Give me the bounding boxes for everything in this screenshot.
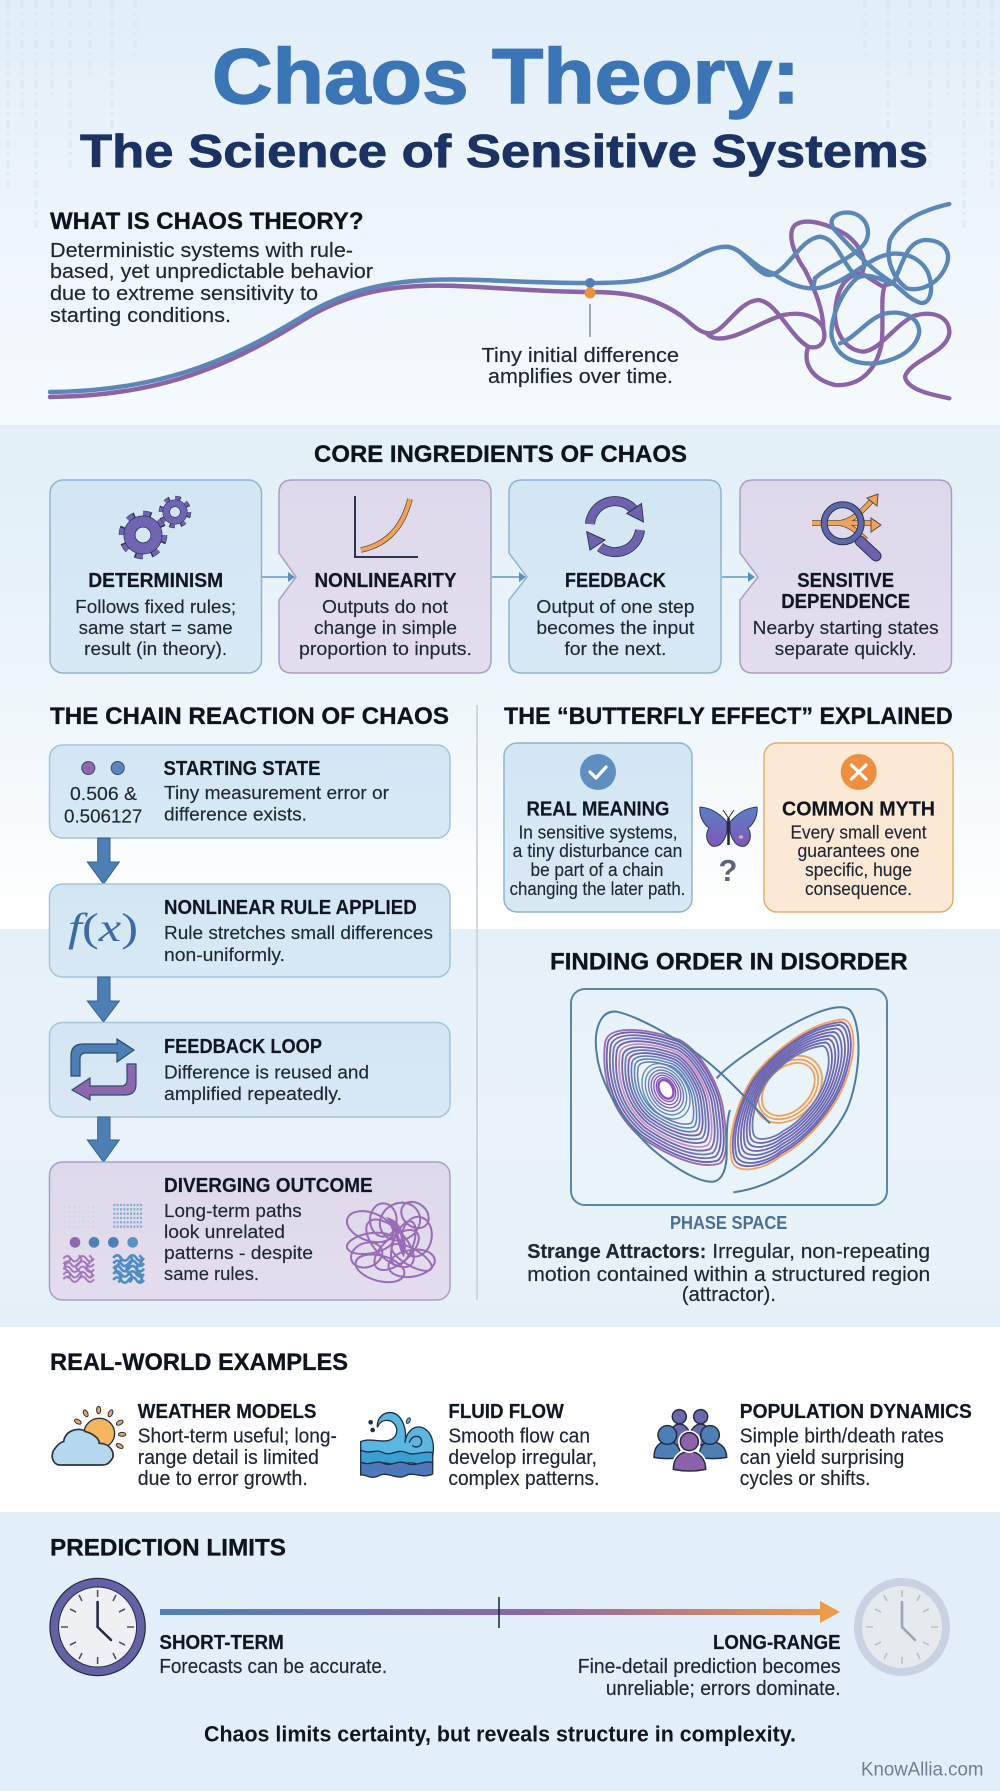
label: common myth: COMMON MYTH	[782, 798, 935, 820]
text: weather models	[138, 1401, 337, 1490]
text: diverging outcome: look unrelated	[164, 1221, 285, 1242]
arrow: feedback to sensitive dependence	[722, 572, 755, 582]
text: short-term	[159, 1632, 387, 1678]
text: real meaning	[510, 821, 685, 899]
text: feedback loop: FEEDBACK LOOP	[164, 1036, 322, 1058]
text: feedback loop	[164, 1036, 369, 1104]
label: feedback: FEEDBACK	[565, 570, 666, 592]
heading: prediction limits: PREDICTION LIMITS	[50, 1535, 286, 1562]
text: real meaning: changing the later path.	[510, 878, 685, 899]
text: common myth: consequence.	[805, 878, 912, 899]
text: closing statement: Chaos limits certainty, but reveals structure in complexity.	[204, 1722, 796, 1747]
arrow: step 1 to 2	[87, 838, 119, 884]
text: common myth: guarantees one	[798, 840, 920, 861]
text: fluid flow: complex patterns.	[448, 1467, 599, 1490]
icon: nonlinear curve	[355, 496, 418, 557]
text: nonlinearity description	[299, 596, 472, 659]
arrow: nonlinearity to feedback	[492, 572, 526, 582]
label: sensitive dependence: SENSITIVE	[797, 570, 894, 592]
text: sensitive dependence description	[753, 617, 939, 659]
card: real meaning	[504, 743, 692, 912]
step: feedback loop	[50, 1022, 450, 1117]
text: feedback description: Output of one step	[536, 596, 694, 617]
caption: tiny initial difference	[482, 344, 679, 388]
chart: speckle pattern grid	[63, 1205, 144, 1283]
icon: loop arrows	[71, 1039, 136, 1100]
text: long-range: unreliable; errors dominate.	[606, 1677, 841, 1700]
text: weather models: Short-term useful; long-	[138, 1425, 337, 1448]
text: long-range	[578, 1632, 841, 1700]
icon: check mark	[580, 754, 616, 790]
icon: f(x): f(x)	[68, 905, 138, 950]
text: weather models: WEATHER MODELS	[138, 1401, 316, 1423]
text: nonlinearity description: proportion to inputs.	[299, 638, 472, 659]
values: starting numbers: 0.506127	[64, 806, 142, 826]
text: fluid flow	[448, 1401, 599, 1490]
heading: core ingredients: CORE INGREDIENTS OF CHAOS	[314, 441, 687, 468]
text: starting state: difference exists.	[164, 804, 307, 824]
text: population dynamics: cycles or shifts.	[740, 1467, 870, 1490]
chart: lorenz attractor	[596, 1007, 858, 1192]
text: population dynamics: Simple birth/death rates	[740, 1425, 944, 1448]
heading: what is chaos theory: WHAT IS CHAOS THEORY?	[50, 208, 364, 235]
panel: real-world examples	[50, 1349, 972, 1490]
label: nonlinearity: NONLINEARITY	[314, 570, 457, 592]
panel: chain reaction	[50, 703, 450, 1300]
label: sensitive dependence: DEPENDENCE	[781, 591, 910, 613]
text: short-term: Forecasts can be accurate.	[159, 1655, 387, 1678]
heading: finding order: FINDING ORDER IN DISORDER	[550, 949, 908, 976]
text: population dynamics	[740, 1401, 972, 1490]
heading: butterfly effect: THE “BUTTERFLY EFFECT” EXPLAINED	[504, 703, 953, 730]
text: nonlinear rule: NONLINEAR RULE APPLIED	[164, 897, 417, 919]
marker: tiny difference	[584, 278, 596, 337]
step: nonlinear rule applied	[50, 884, 450, 977]
text: nonlinearity description: Outputs do not	[322, 596, 448, 617]
icon: faded clock	[854, 1578, 950, 1676]
text: feedback description: becomes the input	[536, 617, 694, 638]
text: determinism description: Follows fixed rules;	[75, 596, 236, 617]
text: strange attractors	[527, 1240, 930, 1306]
text: feedback loop: Difference is reused and	[164, 1062, 369, 1083]
text: sensitive dependence description: separate quickly.	[775, 638, 917, 659]
panel: what is chaos theory	[50, 204, 949, 398]
text: fluid flow: Smooth flow can	[448, 1425, 590, 1448]
card: feedback	[509, 480, 721, 673]
text: nonlinear rule	[164, 897, 433, 965]
text: real meaning: be part of a chain	[530, 859, 664, 880]
text: nonlinearity description: change in simple	[314, 617, 457, 638]
text: common myth	[790, 821, 926, 899]
panel: prediction limits	[50, 1535, 983, 1781]
title	[80, 32, 928, 177]
text: population dynamics: can yield surprising	[740, 1446, 904, 1469]
values: starting numbers	[64, 783, 142, 826]
text: long-range: LONG-RANGE	[713, 1632, 841, 1654]
arrow: step 3 to 4	[87, 1117, 119, 1162]
step: diverging outcome	[50, 1162, 450, 1300]
text: weather models: due to error growth.	[138, 1467, 308, 1490]
text block: definition	[50, 239, 373, 327]
card: sensitive dependence	[740, 480, 952, 673]
text: feedback description	[536, 596, 694, 659]
label: determinism: DETERMINISM	[88, 570, 223, 592]
text block: definition: based, yet unpredictable behavior	[50, 260, 373, 283]
text: diverging outcome	[164, 1175, 373, 1284]
text: fluid flow: develop irregular,	[448, 1446, 597, 1469]
example: fluid flow	[361, 1401, 599, 1490]
text: short-term: SHORT-TERM	[159, 1632, 284, 1654]
text: diverging outcome: patterns - despite	[164, 1242, 313, 1263]
text: strange attractors: motion contained within a structured region	[527, 1263, 930, 1286]
arrow: step 2 to 3	[87, 977, 119, 1022]
text: long-range: Fine-detail prediction becomes	[578, 1655, 841, 1678]
chart: tangled path	[343, 1195, 437, 1287]
card: determinism	[50, 480, 262, 673]
caption: tiny initial difference: amplifies over time.	[488, 365, 673, 388]
icon: sharp clock	[50, 1578, 145, 1676]
label: phase space: PHASE SPACE	[670, 1213, 787, 1233]
card: common myth	[764, 743, 953, 912]
icon: people group	[654, 1410, 727, 1472]
chart: phase space box	[571, 989, 887, 1205]
text block: definition: due to extreme sensitivity to	[50, 282, 318, 305]
icon: magnifier with diverging arrows	[812, 494, 881, 556]
icon: refresh cycle	[587, 501, 644, 552]
values: starting numbers: 0.506 &	[70, 783, 138, 804]
arrow: determinism to nonlinearity	[262, 572, 295, 582]
text: starting state: STARTING STATE	[164, 758, 320, 780]
text: weather models: range detail is limited	[138, 1446, 319, 1469]
text: diverging outcome: same rules.	[164, 1263, 259, 1284]
panel: finding order in disorder	[527, 949, 930, 1306]
heading: real-world examples: REAL-WORLD EXAMPLES	[50, 1349, 348, 1376]
example: weather models	[52, 1401, 337, 1490]
text: starting state: Tiny measurement error or	[164, 782, 389, 803]
title: The Science of Sensitive Systems	[80, 125, 928, 177]
text: starting state	[164, 758, 389, 824]
text: strange attractors: Strange Attractors:	[527, 1240, 706, 1263]
text: determinism description: same start = same	[79, 617, 233, 638]
text: real meaning: In sensitive systems,	[518, 821, 678, 842]
text: diverging outcome: DIVERGING OUTCOME	[164, 1175, 373, 1197]
chart: diverging trajectories	[50, 204, 949, 398]
example: population dynamics	[654, 1401, 972, 1490]
text: strange attractors: Irregular, non-repeating	[712, 1240, 930, 1263]
text: common myth: specific, huge	[805, 859, 912, 880]
text block: definition: starting conditions.	[50, 304, 231, 327]
text: nonlinear rule: non-uniformly.	[164, 944, 285, 965]
arrow: prediction timeline	[160, 1597, 840, 1628]
icon: butterfly	[700, 807, 757, 846]
caption: tiny initial difference: Tiny initial difference	[482, 344, 679, 367]
text: feedback description: for the next.	[564, 638, 666, 659]
text: site credit: KnowAllia.com	[861, 1759, 983, 1781]
step: starting state	[50, 745, 450, 838]
label: real meaning: REAL MEANING	[526, 798, 670, 820]
text: sensitive dependence description: Nearby starting states	[753, 617, 939, 638]
icon: sun and cloud	[52, 1406, 126, 1465]
icon: gears	[122, 498, 188, 556]
text: diverging outcome: Long-term paths	[164, 1200, 302, 1221]
text: real meaning: a tiny disturbance can	[513, 840, 682, 861]
icon: question mark: ?	[719, 853, 737, 888]
label: sensitive dependence	[781, 570, 910, 613]
card: nonlinearity	[279, 480, 491, 673]
icon: waves	[361, 1413, 433, 1477]
text: feedback loop: amplified repeatedly.	[164, 1083, 342, 1104]
text: determinism description: result (in theory).	[84, 638, 227, 659]
panel: core ingredients	[50, 441, 952, 673]
text: strange attractors: (attractor).	[682, 1283, 776, 1306]
text: common myth: Every small event	[790, 821, 926, 842]
text: determinism description	[75, 596, 236, 659]
panel: butterfly effect	[504, 703, 953, 912]
text: nonlinear rule: Rule stretches small differences	[164, 922, 433, 943]
text: population dynamics: POPULATION DYNAMICS	[740, 1401, 972, 1423]
title: Chaos Theory:	[212, 32, 800, 120]
icon: two starting dots	[82, 762, 124, 774]
icon: cross mark	[841, 754, 877, 790]
heading: chain reaction: THE CHAIN REACTION OF CHAOS	[50, 703, 449, 730]
text block: definition: Deterministic systems with rule-	[50, 239, 353, 262]
text: fluid flow: FLUID FLOW	[448, 1401, 564, 1423]
